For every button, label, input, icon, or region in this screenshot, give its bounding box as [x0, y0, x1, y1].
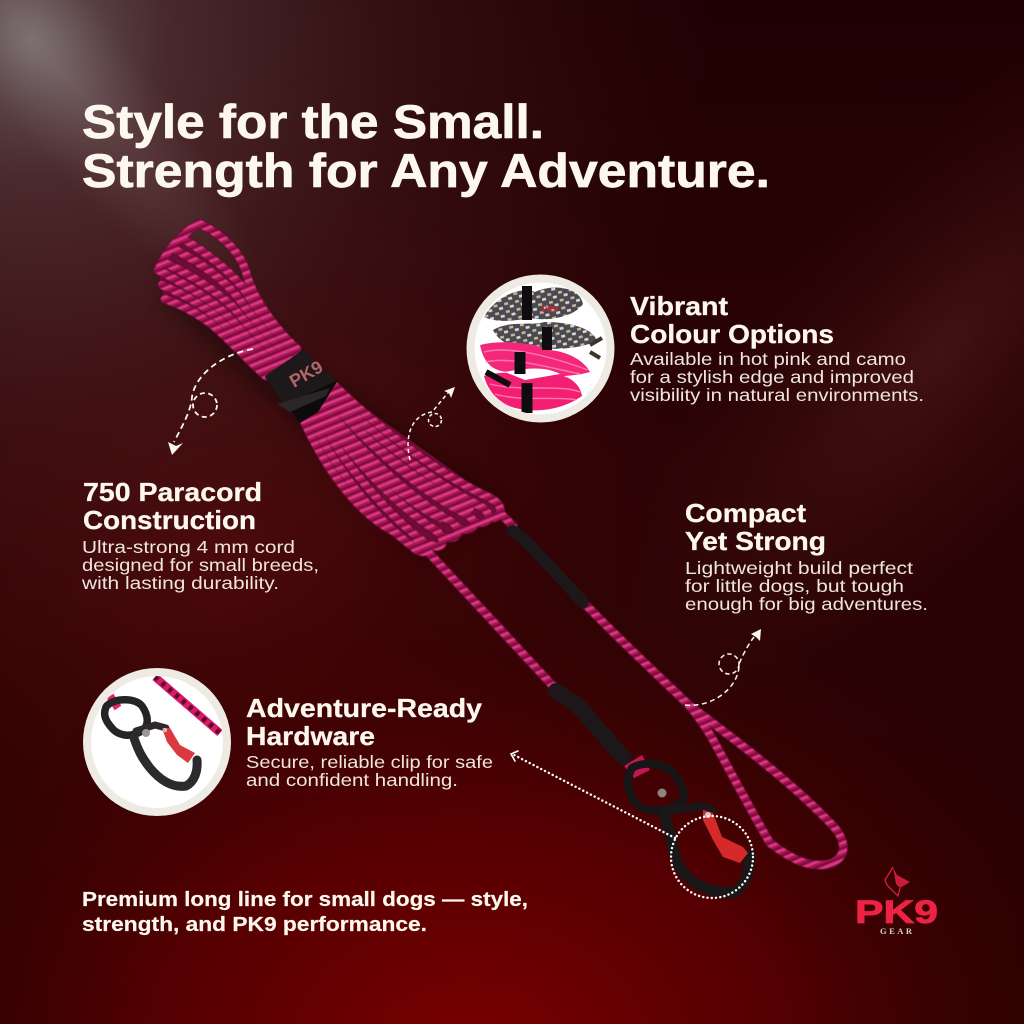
feature text: adventure-ready hardware	[246, 693, 493, 790]
feature text: compact yet strong: for little dogs, but tough	[685, 576, 904, 596]
title	[82, 95, 770, 197]
ring	[105, 700, 147, 735]
closing statement: Premium long line for small dogs — style,	[82, 889, 528, 911]
feature text: 750 paracord construction: 750 Paracord	[83, 477, 262, 507]
feature text: adventure-ready hardware: Secure, reliable clip for safe	[246, 752, 493, 772]
feature text: vibrant colour options: Colour Options	[630, 319, 834, 349]
feature text: 750 paracord construction	[81, 477, 319, 593]
black straps	[486, 286, 602, 413]
feature text: compact yet strong: Lightweight build perfect	[685, 558, 913, 578]
hook body	[664, 815, 750, 893]
velcro band with logo: PK9	[286, 357, 326, 391]
feature text: 750 paracord construction: designed for small breeds,	[82, 555, 319, 575]
feature text: compact yet strong: Yet Strong	[685, 526, 826, 556]
pink coils	[480, 342, 590, 376]
feature text: adventure-ready hardware: Adventure-Ready	[246, 693, 483, 723]
feature text: vibrant colour options: Vibrant	[630, 291, 728, 321]
PK9 Gear logo	[855, 867, 938, 936]
rope strands	[158, 224, 843, 865]
PK9 Gear logo: GEAR	[880, 926, 913, 936]
title: Strength for Any Adventure.	[82, 144, 770, 197]
feature text: compact yet strong: enough for big adventures.	[685, 594, 928, 614]
swivel carabiner	[624, 755, 750, 893]
feature text: vibrant colour options: for a stylish edge and improved	[630, 367, 914, 387]
feature text: 750 paracord construction: with lasting durability.	[81, 573, 279, 593]
swivel ring	[628, 764, 684, 811]
gate	[162, 728, 195, 763]
arrow: compact callout	[685, 629, 761, 705]
feature text: 750 paracord construction: Ultra-strong 4 mm cord	[82, 537, 295, 557]
dotted callout ring and arrow to hardware	[511, 751, 753, 898]
hook	[134, 738, 197, 786]
feature: colour options photo	[466, 274, 614, 422]
feature text: adventure-ready hardware: and confident handling.	[246, 770, 458, 790]
feature text: adventure-ready hardware: Hardware	[246, 721, 375, 751]
feature: colour options photo: PK9	[542, 305, 558, 314]
closing statement: strength, and PK9 performance.	[82, 914, 427, 936]
feature: hardware photo	[83, 668, 231, 816]
camo coils	[484, 288, 583, 321]
rope detail	[155, 677, 220, 733]
feature text: 750 paracord construction: Construction	[83, 505, 256, 535]
feature text: compact yet strong: Compact	[685, 498, 806, 528]
velcro band with logo	[265, 350, 337, 423]
black rubber sleeves	[513, 531, 624, 758]
closing statement	[82, 889, 528, 936]
paracord long line product	[158, 224, 843, 865]
rope bundle underlay	[158, 238, 502, 550]
feature text: vibrant colour options	[630, 291, 924, 405]
title: Style for the Small.	[82, 95, 544, 148]
bundle shadow	[160, 250, 500, 560]
feature text: vibrant colour options: Available in hot pink and camo	[630, 349, 906, 369]
arrow: paracord callout	[168, 349, 253, 455]
arrow: colour callout	[408, 387, 455, 460]
feature text: vibrant colour options: visibility in natural environments.	[630, 385, 924, 405]
red gate	[703, 810, 748, 863]
PK9 Gear logo: PK9	[855, 894, 938, 930]
feature text: compact yet strong	[685, 498, 928, 614]
